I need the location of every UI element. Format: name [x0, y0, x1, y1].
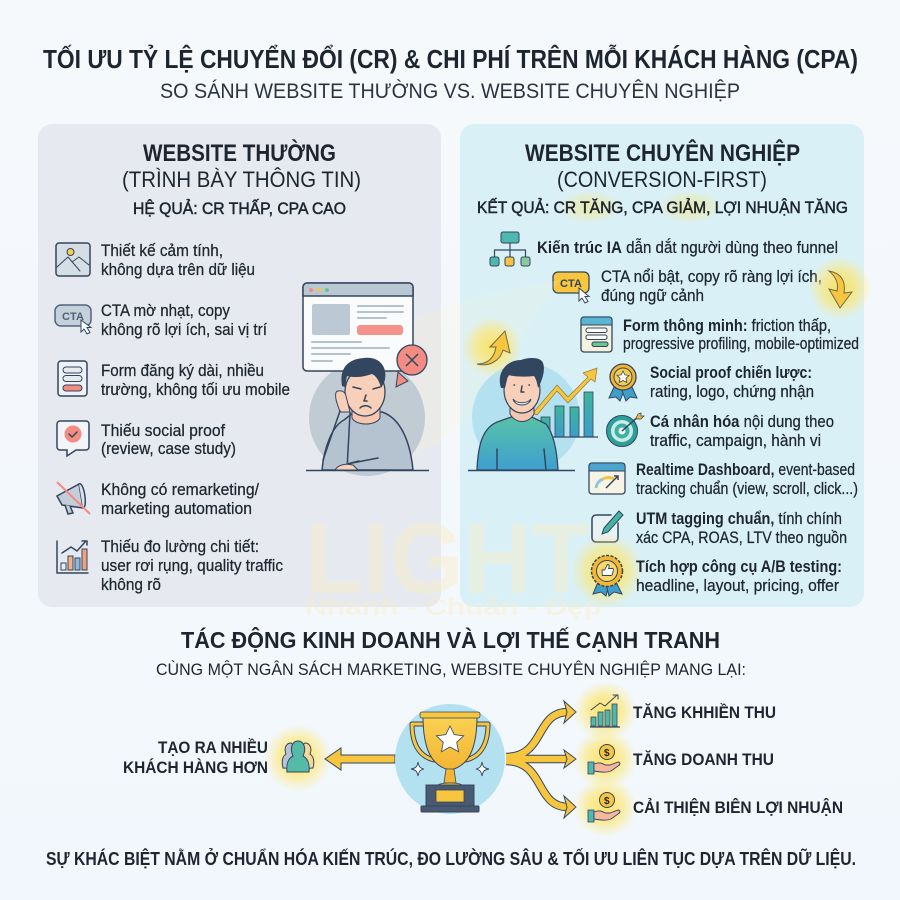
- text: form đăng ký: trường, không tối ưu mobile: [101, 381, 290, 399]
- subtitle: SO SÁNH WEBSITE THƯỜNG VS. WEBSITE CHUYÊN NGHIỆP: [160, 80, 740, 103]
- panel heading: website thường: HỆ QUẢ: CR THẤP, CPA CAO: [133, 199, 346, 218]
- icon: yellow down arrow: [808, 256, 872, 320]
- text: CTA mờ nhạt: CTA mờ nhạt, copy: [101, 302, 231, 320]
- text: realtime dashboard: Realtime Dashboard, event-based: [636, 461, 855, 479]
- icon: bright CTA: [553, 272, 589, 303]
- browser window: [303, 283, 413, 371]
- panel heading: website chuyên nghiệp: [477, 139, 848, 217]
- icon: hand with coin (margin): $: [604, 796, 610, 807]
- icon: faded CTA: CTA: [62, 311, 84, 323]
- illustration: frustrated user: [303, 283, 429, 476]
- text: cá nhân hóa: Cá nhân hóa nội dung theo: [650, 413, 834, 431]
- icon: megaphone crossed: [57, 482, 90, 514]
- icon: org chart: [490, 232, 530, 266]
- text: không remarketing: Không có remarketing/: [101, 481, 259, 499]
- text: UTM: UTM tagging chuẩn, tính chính: [636, 510, 842, 528]
- text: thiết kế: [101, 242, 255, 279]
- icon: medal: [609, 364, 637, 401]
- section subheading: CÙNG MỘT NGÂN SÁCH MARKETING, WEBSITE CHUYÊN NGHIỆP MANG LẠI:: [156, 660, 746, 679]
- text: form thông minh: [623, 317, 859, 353]
- panel heading: website chuyên nghiệp: WEBSITE CHUYÊN NGHIỆP: [525, 139, 800, 167]
- icon: revenue chart: [573, 681, 637, 741]
- watermark: LIGHT: [305, 503, 590, 615]
- icon: hand with coin (revenue): [573, 729, 637, 789]
- text: realtime dashboard: tracking chuẩn (view, scroll, click...): [636, 480, 858, 498]
- panel heading: website thường: [122, 139, 361, 218]
- icon: pencil: [592, 511, 623, 542]
- icon: long form: [58, 361, 87, 396]
- text: cá nhân hóa: traffic, campaign, hành vi: [650, 432, 821, 450]
- text: A/B testing: Tích hợp công cụ A/B testing:: [636, 558, 842, 576]
- panel heading: website thường: WEBSITE THƯỜNG: [143, 139, 336, 167]
- text: social proof: rating, logo, chứng nhận: [650, 383, 814, 401]
- text: không remarketing: [101, 481, 259, 518]
- text: UTM: xác CPA, ROAS, LTV theo nguồn: [636, 529, 847, 547]
- watermark: [305, 280, 602, 621]
- text: social proof: [650, 364, 814, 401]
- label: tăng khhiền thu: TĂNG KHHIỀN THU: [633, 703, 776, 722]
- text: CTA mờ nhạt: [101, 302, 267, 339]
- text: form thông minh: Form thông minh: friction thấp,: [623, 317, 831, 335]
- icon: faded CTA: [55, 305, 91, 334]
- text: thiết kế: Thiết kế cảm tính,: [101, 242, 223, 260]
- panel heading: website chuyên nghiệp: (CONVERSION-FIRST): [557, 167, 767, 192]
- text: thiết kế: không dựa trên dữ liệu: [101, 261, 255, 279]
- text: thiếu social proof: Thiếu social proof: [101, 422, 225, 440]
- arrow: left: [325, 748, 395, 770]
- text: thiếu đo lường: [101, 538, 283, 594]
- label: tạo ra nhiều khách hàng hơn: KHÁCH HÀNG HƠN: [123, 758, 268, 777]
- panel heading: website thường: (TRÌNH BÀY THÔNG TIN): [122, 167, 361, 192]
- section heading: tác động kinh doanh: TÁC ĐỘNG KINH DOANH VÀ LỢI THẾ CẠNH TRANH: [181, 626, 720, 653]
- arrows: branching right: [506, 701, 576, 818]
- text: CTA nổi bật: đúng ngữ cảnh: [601, 287, 704, 305]
- label: tạo ra nhiều khách hàng hơn: TẠO RA NHIỀU: [158, 738, 268, 757]
- illustration: happy user with growth chart: [462, 317, 598, 471]
- icon: chart: [57, 541, 88, 573]
- icon: image placeholder: [56, 243, 90, 276]
- text: không remarketing: marketing automation: [101, 500, 252, 518]
- icon: trophy: [395, 704, 505, 814]
- text: thiếu đo lường: user rơi rụng, quality traffic: [101, 557, 283, 575]
- text: form đăng ký: Form đăng ký dài, nhiều: [101, 362, 264, 380]
- text: UTM: [636, 510, 847, 547]
- icon: chat check: [57, 421, 89, 456]
- label: cải thiện biên lợi nhuận: CẢI THIỆN BIÊN LỢI NHUẬN: [633, 798, 843, 817]
- label: tăng doanh thu: TĂNG DOANH THU: [633, 750, 774, 769]
- up arrow glow: [462, 317, 522, 377]
- text: CTA nổi bật: [601, 268, 822, 305]
- icon: target: [606, 413, 644, 446]
- text: cá nhân hóa: [650, 413, 834, 450]
- error bubble: [396, 345, 427, 387]
- highlight glows: [556, 190, 724, 224]
- man with sad face: [322, 358, 413, 470]
- smiling man: [477, 358, 558, 470]
- text: realtime dashboard: [636, 461, 858, 498]
- text: CTA mờ nhạt: không rõ lợi ích, sai vị trí: [101, 321, 267, 339]
- text: thiếu đo lường: không rõ: [101, 576, 161, 594]
- icon: smart form: [581, 317, 612, 352]
- label: tạo ra nhiều khách hàng hơn: [123, 738, 268, 777]
- icon: people: [264, 724, 332, 792]
- text: A/B testing: headline, layout, pricing, offer: [636, 577, 839, 595]
- text: thiếu social proof: (review, case study): [101, 440, 236, 458]
- icon: dashboard: [589, 463, 625, 494]
- icon: hand with coin (revenue): $: [604, 748, 610, 759]
- text: thiếu social proof: [101, 422, 236, 458]
- text: social proof: Social proof chiến lược:: [650, 364, 812, 382]
- text: kiến trúc IA: Kiến trúc IA dẫn dắt người dùng theo funnel: [537, 238, 838, 257]
- icon: thumbs up badge: [570, 534, 644, 608]
- panel: website thường: [38, 124, 441, 607]
- text: form thông minh: progressive profiling, mobile-optimized: [623, 335, 859, 353]
- text: thiếu đo lường: Thiếu đo lường chi tiết:: [101, 538, 259, 556]
- panel heading: website chuyên nghiệp: KẾT QUẢ: CR TĂNG, CPA GIẢM, LỢI NHUẬN TĂNG: [477, 198, 848, 217]
- text: CTA nổi bật: CTA nổi bật, copy rõ ràng lợi ích,: [601, 268, 822, 286]
- icon: bright CTA: CTA: [560, 278, 582, 290]
- icon: hand with coin (margin): [573, 777, 637, 837]
- text: form đăng ký: [101, 362, 290, 399]
- watermark: Nhanh - Chuẩn - Đẹp: [305, 594, 602, 621]
- panel: website chuyên nghiệp: [460, 124, 872, 608]
- text: A/B testing: [636, 558, 842, 595]
- growth chart: [530, 368, 598, 437]
